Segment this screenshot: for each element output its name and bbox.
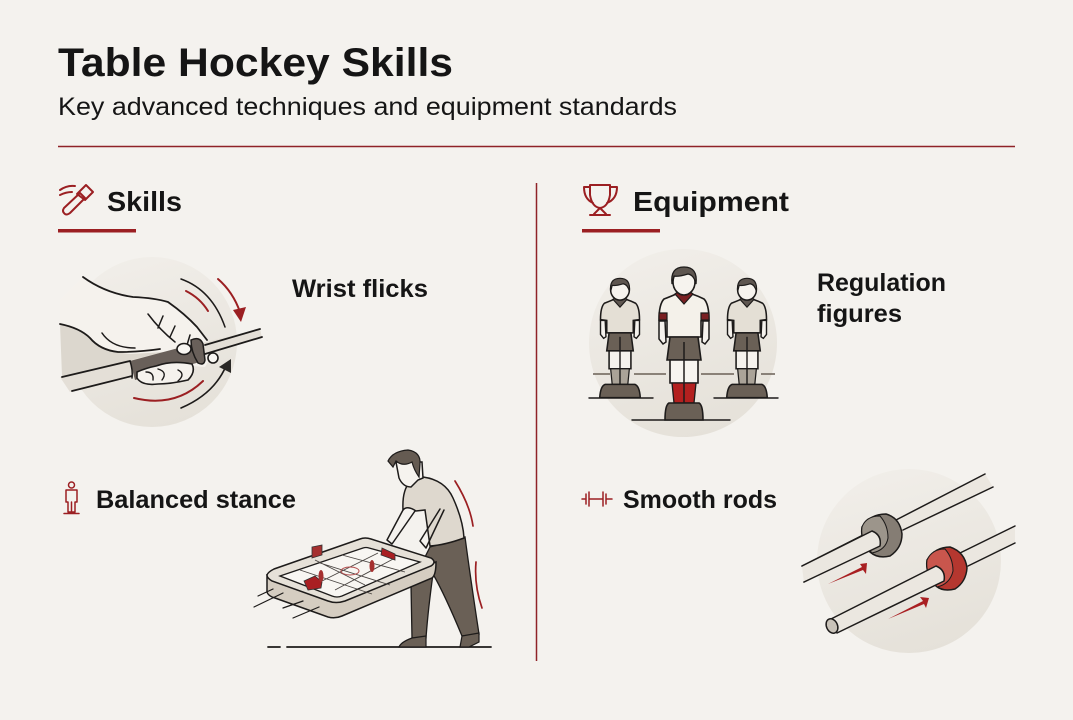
skills heading: [58, 185, 182, 232]
figure: centre: [659, 267, 709, 420]
figure: right: [727, 278, 767, 398]
illustration: regulation figures: [589, 249, 778, 437]
legs: [411, 537, 479, 638]
label: balanced stance: Balanced stance: [96, 486, 296, 514]
fingers: [177, 344, 191, 354]
red pieces: [312, 545, 322, 558]
icon: standing person: [64, 482, 79, 514]
equipment heading: Equipment: [633, 186, 789, 217]
icon: trophy: [584, 185, 617, 215]
illustration: wrist flick hand on rod: [60, 257, 262, 427]
illustration: player at table: [254, 450, 491, 647]
table: [267, 562, 436, 618]
arm and hand: [60, 277, 214, 367]
motion strokes: [455, 481, 482, 608]
rod: [60, 329, 262, 392]
label: regulation figures: figures: [817, 300, 902, 328]
skills heading: Skills: [107, 186, 182, 217]
head: [396, 462, 423, 487]
illustration: smooth rods: [802, 469, 1015, 653]
icon: hammer: [60, 185, 93, 214]
figure: left: [600, 278, 640, 398]
arms: [387, 509, 444, 548]
label: regulation figures: [817, 269, 946, 328]
red arrows: [828, 563, 867, 584]
label: wrist flicks: Wrist flicks: [292, 275, 428, 303]
subtitle: Key advanced techniques and equipment standards: [58, 93, 677, 121]
label: smooth rods: Smooth rods: [623, 486, 777, 514]
icon: dumbbell: [582, 492, 612, 506]
collar: [191, 339, 205, 364]
grey collar: [862, 514, 902, 557]
ground line: [268, 646, 491, 648]
rod 1: [802, 474, 993, 582]
table rods: [254, 589, 319, 618]
floor lines: [593, 373, 775, 375]
torso: [403, 477, 464, 546]
label: regulation figures: Regulation: [817, 269, 946, 297]
equipment heading: [582, 185, 789, 232]
panel: skills: [58, 185, 491, 647]
rod 2: [827, 526, 1015, 633]
title: Table Hockey Skills: [58, 41, 453, 85]
motion arrows: [181, 279, 225, 327]
panel: equipment: [582, 185, 1015, 653]
red collar: [927, 547, 967, 590]
